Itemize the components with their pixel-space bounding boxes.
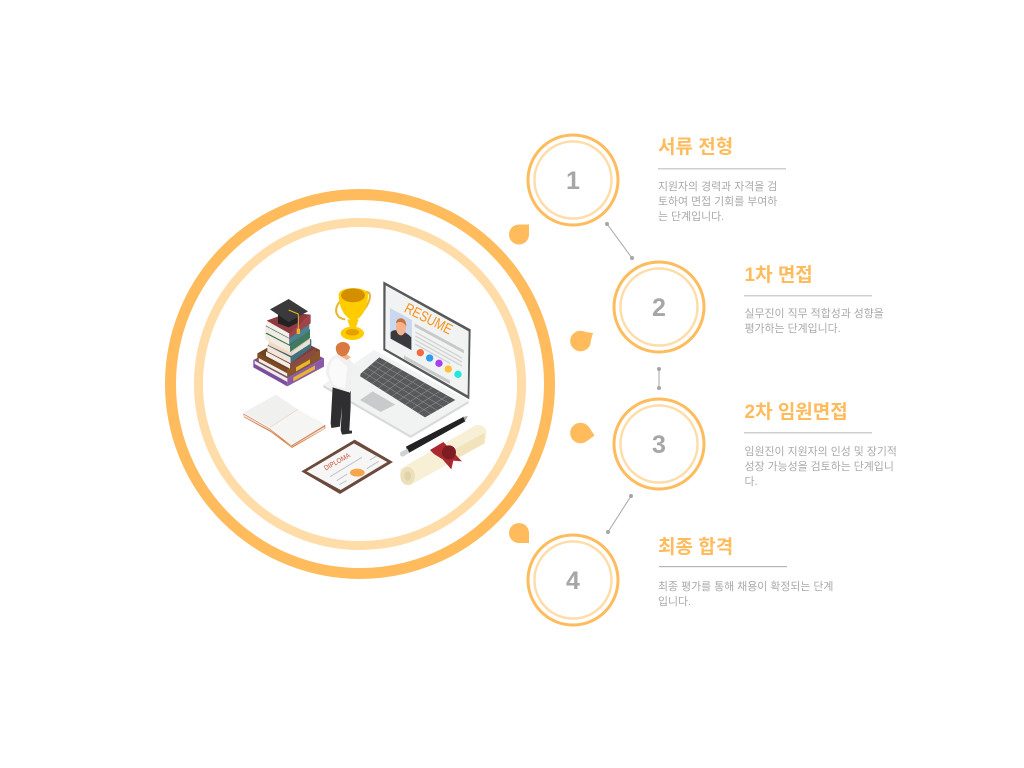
step 3 description: 성장 가능성을 검토하는 단계입니 — [744, 459, 894, 473]
step 2 text — [744, 264, 884, 335]
step 4 description: 입니다. — [658, 595, 691, 608]
icon: droplet 4 — [509, 523, 529, 543]
icon: person from behind — [326, 342, 361, 435]
step 2 heading: 1차 면접 — [744, 264, 813, 286]
step 3 text — [744, 401, 897, 488]
keyboard — [359, 357, 455, 417]
icon: diploma scroll — [400, 425, 487, 485]
step 2 circle — [614, 262, 704, 352]
big circle rings — [170, 194, 550, 574]
arrows: connectors between steps — [606, 222, 660, 534]
step 3 description: 임원진이 지원자의 인성 및 장기적 — [744, 445, 897, 458]
step 4 circle — [528, 535, 618, 625]
step 1 circle — [528, 135, 618, 225]
icon: framed diploma — [301, 440, 393, 494]
step 1 circle: 1 — [566, 167, 580, 195]
step 3 circle — [614, 399, 704, 489]
resume photo — [390, 308, 412, 351]
resume heading: RESUME — [402, 301, 455, 338]
icon: droplet 2 — [570, 331, 593, 351]
step 1 description: 는 단계입니다. — [658, 210, 724, 223]
step 4 description: 최종 평가를 통해 채용이 확정되는 단계 — [658, 579, 833, 593]
step 3 heading: 2차 임원면접 — [744, 401, 848, 423]
step 4 heading: 최종 합격 — [658, 536, 733, 558]
step 1 description: 지원자의 경력과 자격을 검 — [658, 180, 777, 193]
icon: trophy — [336, 288, 370, 340]
step 1 text — [658, 136, 786, 223]
illustration: career documents and job seeker — [243, 281, 487, 494]
icon: droplet 3 — [570, 423, 594, 443]
icon: book stack — [253, 313, 324, 386]
step 1 description: 토하여 면접 기회를 부여하 — [658, 194, 777, 208]
step 4 circle: 4 — [566, 567, 580, 595]
step 1 heading: 서류 전형 — [658, 136, 733, 158]
icon: droplet 1 — [509, 224, 529, 244]
step 2 description: 실무진이 직무 적합성과 성향을 — [744, 307, 884, 320]
icon: laptop — [323, 281, 471, 438]
step 4 text — [658, 536, 833, 608]
step 3 description: 다. — [744, 475, 758, 488]
icon: pen — [400, 416, 468, 457]
icon: graduation cap — [270, 299, 308, 334]
step 3 circle: 3 — [652, 431, 666, 459]
icon: open book — [243, 395, 325, 448]
diploma label: DIPLOMA — [323, 452, 352, 472]
step 2 circle: 2 — [652, 294, 666, 322]
step 2 description: 평가하는 단계입니다. — [744, 321, 841, 335]
